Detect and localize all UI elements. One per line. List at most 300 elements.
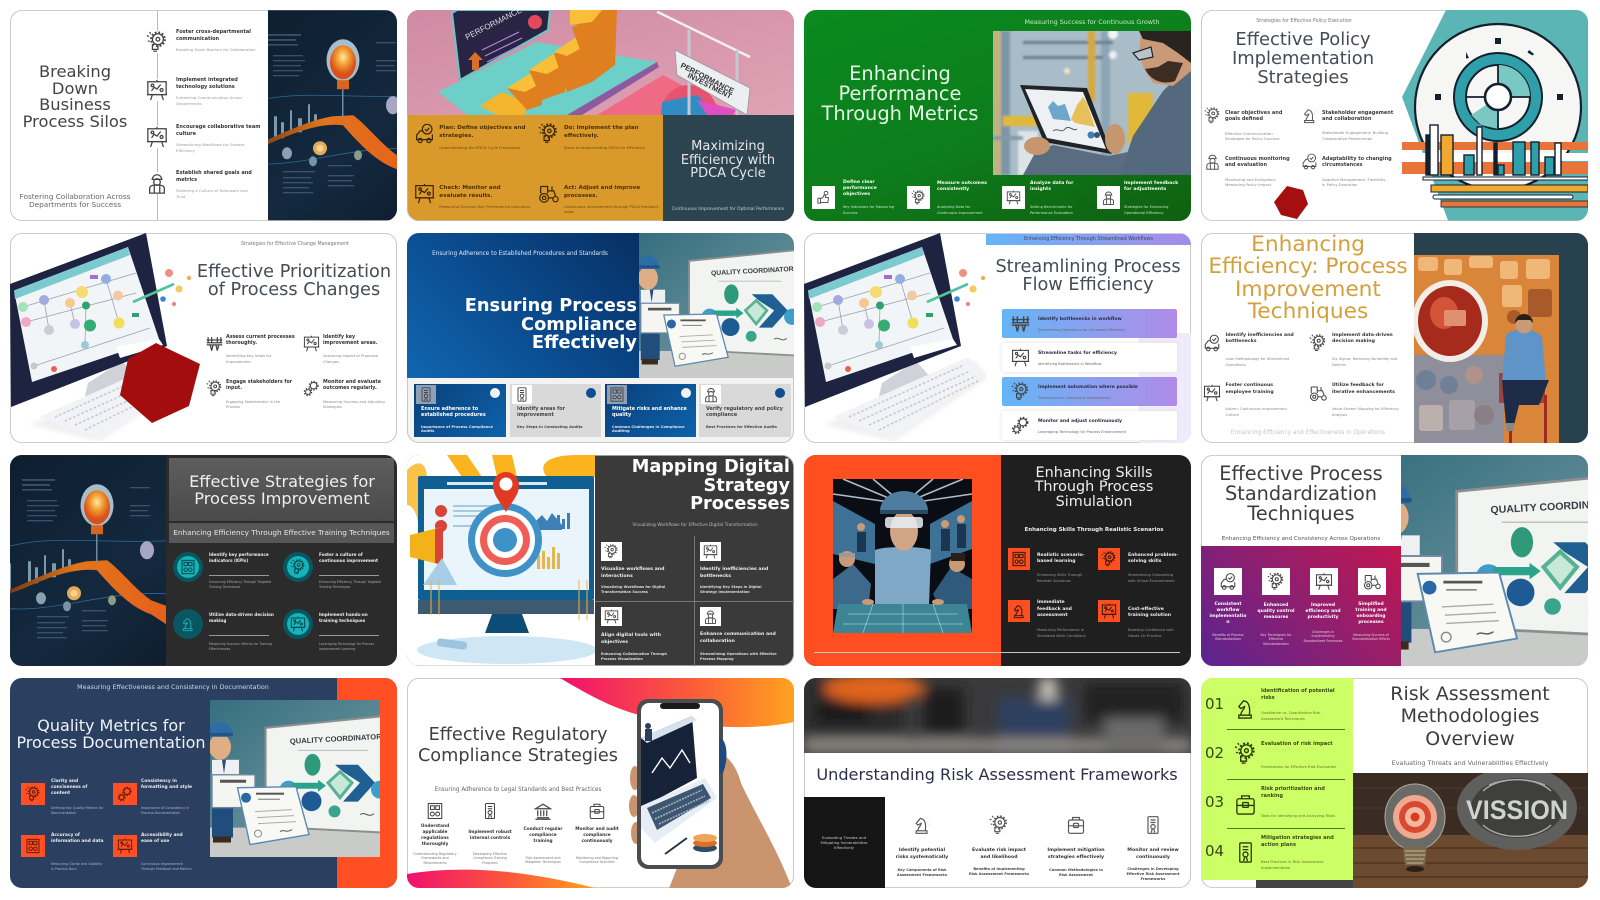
item: enhanced quality (1252, 568, 1300, 646)
item: improved efficiency: Improved (1311, 603, 1335, 608)
subtitle (820, 835, 868, 850)
item: do: Steps to Implementing PDCA for Efficiency (564, 145, 645, 150)
title: Flow Efficiency (1022, 275, 1154, 295)
panel: Effective Regulatory Compliance Strategies (407, 678, 794, 888)
item: enhanced quality: quality control (1257, 609, 1295, 614)
image: man beside food plate collage (1414, 254, 1559, 444)
card: identify areas: Identify areas for (517, 406, 565, 412)
item: consistency: Consistency in (141, 779, 177, 784)
item: adaptability: Adaptability to changing (1322, 156, 1392, 162)
title (23, 62, 127, 131)
item: adaptability: circumstances (1322, 162, 1363, 168)
item: performance objectives: Key Indicators for Measuring (843, 205, 894, 209)
item: scenario-based learning: Enhancing Skills Through (1037, 573, 1082, 577)
panel: Mapping Digital Strategy Processes (407, 455, 794, 666)
title: of Process Changes (208, 280, 380, 300)
card: ensure adherence: Audits (421, 429, 434, 433)
item: identify risks: Assessment Frameworks (897, 872, 947, 876)
item: analyze data: Performance Evaluation (1030, 211, 1073, 215)
panel: blue title block (407, 232, 639, 378)
item: improved efficiency: Implementing (1312, 634, 1334, 638)
item: monitor outcomes: Monitor and evaluate (323, 380, 381, 384)
item: monitor and audit: Monitoring and Reporting (576, 856, 618, 860)
item: do (538, 123, 645, 150)
item: immediate feedback: Immediate (1037, 600, 1065, 605)
image: bulb and city (10, 455, 166, 666)
item: clear objectives: Strategies for Policy Success (1225, 136, 1279, 141)
item: data-driven decision making: Utilize data-driven decision (209, 612, 274, 617)
item: simplified training: training and (1355, 608, 1387, 613)
banner: subtitle (169, 523, 394, 543)
item: evaluate impact: and likelihood (980, 854, 1018, 860)
title: Efficiency: Process (1208, 254, 1408, 279)
subtitle: Evaluating Threats and (822, 835, 866, 840)
item 01 (1205, 688, 1349, 726)
item: data-driven decisions: Six Sigma: Reducing Variability and (1332, 356, 1397, 360)
item: accessibility: ease of use (141, 839, 169, 844)
panel: Ensuring Process Compliance Effectively (407, 232, 794, 443)
item: analyze data: Setting Benchmarks for (1030, 205, 1072, 209)
title (1390, 682, 1550, 750)
item: clear objectives: Clear objectives and (1225, 110, 1282, 116)
item: assess current processes (206, 334, 295, 364)
item: cost-effective training: Cost-effective (1128, 606, 1164, 612)
item: plan: Understanding the PDCA Cycle Framework (439, 145, 520, 150)
item: problem solving: Enhanced problem- (1128, 552, 1178, 558)
item: identify KPIs: Identify key performance (209, 552, 269, 557)
item: immediate feedback: Simulated Work Conditions (1037, 634, 1086, 638)
item: visualize workflows: Visualize workflows and (601, 566, 664, 572)
subtitle: Effectively (834, 845, 854, 850)
item: align digital tools: Process Visualization (601, 656, 643, 660)
item: visualize workflows: Transformation Success (601, 590, 648, 594)
panel: orange block (804, 455, 1001, 666)
image: quality coordinator (639, 233, 794, 378)
item: performance objectives: Define clear (843, 180, 875, 185)
item: monitor and review: continuously (1136, 854, 1170, 860)
card: mitigate risks: Common Challenges in Compliance (612, 424, 685, 428)
item: collaborative team culture: Efficiency (176, 148, 195, 153)
item: performance objectives: performance (843, 186, 877, 191)
item: culture of improvement (283, 552, 393, 592)
item: immediate feedback: assessment (1037, 613, 1068, 618)
item: integrated technology: Departments (176, 101, 202, 106)
item: cost-effective training: Boosting Confidence with (1128, 628, 1174, 632)
item: scenario-based learning: Realistic scenario- (1037, 552, 1085, 558)
item: implement mitigation: strategies effectively (1048, 854, 1104, 860)
item: consistent workflow: implementatio (1210, 614, 1246, 619)
item: culture of improvement: Training Techniques (319, 584, 350, 588)
item: internal controls: Programs (482, 861, 498, 865)
item: engage stakeholders: Process (226, 405, 240, 409)
item: adaptability: in Policy Execution (1322, 182, 1357, 187)
item: monitor and audit: continuously (581, 839, 613, 844)
title: Streamlining Process (995, 256, 1181, 276)
item: stakeholder engagement: Stakeholder engagement (1322, 110, 1393, 116)
item: act: loops (564, 209, 574, 214)
item: identify inefficiencies: Identifying Key Steps in Digital (700, 584, 762, 588)
item: immediate feedback: feedback and (1037, 607, 1072, 612)
title: Through Process (1035, 479, 1153, 495)
item: shared goals: Trust (176, 194, 185, 199)
card: identify areas: improvement (517, 412, 554, 418)
item: internal controls: Implement robust (468, 830, 512, 835)
item: simplified training: onboarding (1356, 614, 1386, 619)
panel: Effective Strategies for Process Improvement (10, 455, 397, 666)
item 01: risks (1261, 695, 1275, 701)
image: engineer with tablet (993, 31, 1191, 175)
item: utilize feedback: iterative enhancements (1332, 390, 1395, 395)
item: monitor and audit (573, 802, 621, 868)
banner: subtitle (986, 234, 1191, 244)
card: verify compliance: Best Practices for Effective Audits (706, 424, 777, 428)
item: cost-effective training: Hands-On Practice (1128, 634, 1161, 638)
item: identify inefficiencies (700, 542, 790, 597)
item: monitor outcomes (304, 379, 385, 409)
title (681, 139, 775, 181)
item: understand regulations: regulations (421, 836, 449, 841)
title: Breaking (39, 62, 111, 81)
card: verify compliance: compliance (706, 412, 737, 418)
item: consistent workflow: Standardization (1215, 637, 1241, 641)
item: hands-on training (283, 609, 393, 652)
item: identify KPIs (173, 552, 281, 592)
subtitle: Strategies for Effective Change Management (241, 242, 349, 246)
item: align digital tools: objectives (601, 640, 628, 644)
item: monitor and review: Monitor and review (1127, 848, 1179, 852)
item: enhanced quality: Standardization (1263, 642, 1289, 646)
item: continuous monitoring (1206, 154, 1290, 187)
item: enhanced quality: measures (1264, 615, 1288, 620)
item: implement feedback (1097, 180, 1178, 215)
item: utilize feedback: Utilize feedback for (1332, 383, 1384, 388)
title (1208, 232, 1408, 324)
item 01: 01 (1205, 694, 1224, 712)
subtitle: Mitigating Vulnerabilities (820, 840, 868, 845)
title (189, 472, 375, 506)
item: assess current processes: Assess current processes (226, 334, 295, 340)
item: consistency: Process Documentation (141, 811, 180, 815)
item: continuous monitoring: Monitoring and Evaluation: (1225, 176, 1276, 182)
item: problem solving: Streamlining Onboarding (1128, 573, 1173, 577)
item: compliance training: training (533, 839, 553, 844)
item: accuracy: in Process Docs (51, 867, 77, 871)
item 04: 04 (1205, 842, 1224, 860)
panel: dark side block (1414, 232, 1588, 444)
item: monitor and review: Frameworks (1141, 876, 1165, 880)
title: Process Documentation (16, 732, 206, 752)
item 02: Frameworks for Effective Risk Evaluation (1261, 764, 1336, 768)
row: monitor and adjust: Monitor and adjust continuously (1038, 419, 1122, 424)
item: collaborative team culture: Streamlining Workflows for Greater (176, 142, 244, 147)
item: identify inefficiencies: bottlenecks (1226, 339, 1257, 344)
title (632, 458, 790, 514)
item 03: Risk prioritization and (1261, 786, 1325, 792)
item: utilize feedback: Value Stream Mapping for Efficiency (1332, 407, 1399, 411)
panel: Effective Policy Implementation Strategies (1201, 10, 1588, 220)
item: identify risks: Key Components of Risk (897, 868, 947, 872)
item: employee training: Kaizen: Continuous Improvement (1226, 407, 1287, 411)
title: Effectively (532, 332, 637, 353)
image: performance staircase: PERFORMANCE (679, 61, 736, 95)
item: simplified training (1347, 568, 1397, 646)
item: implement mitigation: Common Methodologies in (1049, 868, 1103, 872)
item: shared goals: metrics (176, 177, 197, 183)
item: cross-departmental communication: Breaking Down Barriers for Collaboration (176, 47, 256, 52)
item: act: Act: Adjust and improve (564, 185, 640, 191)
title (1232, 28, 1374, 88)
item 01: Qualitative vs. Quantitative Risk (1261, 711, 1321, 715)
item: plan (416, 124, 526, 150)
image: performance staircase (407, 10, 794, 115)
item: improved efficiency: efficiency and (1305, 609, 1341, 614)
title: Strategy (704, 476, 790, 496)
item: adaptability (1302, 154, 1392, 187)
item: measure outcomes: Measure outcomes (937, 181, 987, 186)
image: blurred machinery banner (804, 678, 1191, 752)
subtitle: Strategies for Effective Policy Execution (1256, 19, 1352, 24)
item: enhance communication: Streamlining Operations with Effective (700, 652, 777, 656)
item: compliance training: compliance (529, 833, 557, 838)
item: enhance communication: Enhance communication and (700, 632, 776, 636)
subtitle: Visualizing Workflows for Effective Digital Transformation (632, 523, 758, 528)
title: Enhancing (849, 62, 951, 85)
item: key improvement areas: Changes (323, 360, 339, 364)
banner: subtitle: Enhancing Efficiency Through Streamlined Workflows (1024, 236, 1153, 242)
item: accessibility: Accessibility and (141, 833, 183, 838)
item: performance objectives: Success (843, 211, 857, 215)
item: check: evaluate results. (439, 193, 493, 199)
title (197, 262, 391, 300)
item: implement feedback: Implement feedback (1124, 181, 1178, 186)
item: data-driven decisions (1310, 332, 1397, 366)
item: accuracy: Measuring Clarity and Usability (51, 862, 102, 866)
item: engage stakeholders: Engage stakeholders for (226, 380, 292, 384)
item: cross-departmental communication: Foster cross-departmental (176, 29, 251, 35)
title: Methodologies (1401, 705, 1539, 727)
row: identify bottlenecks: Streamlining Operations for Increased Efficiency (1038, 328, 1125, 332)
item: cross-departmental communication: communication (176, 36, 219, 42)
title: Implementation (1232, 48, 1374, 68)
title: Simulation (1056, 494, 1132, 510)
item: understand regulations: thoroughly (422, 842, 448, 847)
row: monitor and adjust: Leveraging Technology for Process Enhancement (1038, 430, 1126, 434)
item: identify inefficiencies: Lean Methodology for Streamlined (1226, 356, 1289, 360)
item: engage stakeholders: Engaging Stakeholders in the (226, 400, 280, 404)
item: enhanced quality: Effective (1269, 637, 1283, 641)
item: integrated technology: Enhancing Communication Across (176, 95, 242, 100)
subtitle (20, 192, 130, 209)
subtitle: Ensuring Adherence to Legal Standards and Best Practices (435, 786, 601, 792)
item: understand regulations: Requirements (424, 861, 446, 865)
image: quality coordinator (1401, 455, 1588, 666)
item: clear objectives (1204, 107, 1282, 141)
item: clear objectives: goals defined (1225, 116, 1263, 122)
item: enhanced quality: Key Techniques for (1261, 633, 1291, 637)
caption: Enhancing Efficiency and Effectiveness in Operations (1231, 430, 1385, 436)
item: culture of improvement: continuous improvement (319, 558, 378, 563)
panel: dark title block (663, 115, 794, 221)
item: visualize workflows: interactions (601, 574, 633, 578)
item: monitor outcomes: Strategies (323, 405, 342, 409)
panel: Risk Assessment Methodologies Overview (1201, 678, 1588, 888)
item: culture of improvement: Enhancing Efficiency Through Targeted (319, 580, 381, 584)
item: clarity: Defining Key Quality Metrics for (51, 806, 103, 810)
row: implement automation: Techniques for Continuous Improvement (1038, 396, 1111, 400)
item: clarity: conciseness of (51, 785, 87, 790)
item: key improvement areas: Assessing Impact of Proposed (323, 354, 378, 358)
item: data-driven decisions: decision making (1332, 339, 1375, 344)
panel: green list block (1201, 678, 1353, 880)
item: identify KPIs: indicators (KPIs) (209, 558, 248, 563)
item: consistent workflow: Benefits of Process (1212, 633, 1244, 637)
item: assess current processes: Improvement (226, 360, 251, 364)
image: target bulb and vision sign: VISSION (1466, 794, 1568, 824)
title (1035, 466, 1153, 509)
subtitle: Continuous Improvement for Optimal Performance (672, 207, 784, 212)
panel: Enhancing Efficiency: Process Improvement Techniques (1201, 232, 1588, 443)
title: Process Silos (23, 112, 127, 131)
title: Business (39, 95, 111, 114)
item: understand regulations: Understanding Regulatory (413, 852, 457, 856)
item: continuous monitoring: Measuring Policy Impact (1225, 182, 1271, 187)
row: identify bottlenecks (1002, 308, 1177, 338)
item: clarity (21, 779, 106, 817)
item: identify KPIs: Enhancing Efficiency Through Targeted (209, 580, 271, 584)
item: implement mitigation: Implement mitigation (1047, 848, 1105, 852)
item: clarity: content (51, 791, 70, 796)
item: evaluate impact (975, 814, 1023, 880)
item: assess current processes: Identifying Key Areas for (226, 354, 271, 358)
card: mitigate risks: Mitigate risks and enhance (612, 406, 687, 412)
title: Ensuring Process (465, 295, 637, 316)
item: stakeholder engagement: and collaboration (1322, 116, 1371, 122)
item: consistent workflow: Consistent (1214, 602, 1242, 607)
item: act (539, 185, 659, 214)
item: evaluate impact: Evaluate risk impact (972, 848, 1026, 852)
item: enhanced quality: Enhanced (1264, 603, 1288, 608)
decoration: red hexagon (1274, 186, 1308, 219)
row: monitor and adjust (1002, 411, 1177, 440)
item: align digital tools: Enhancing Collaboration Through (601, 652, 667, 656)
item: implement feedback: Strategies for Enhancing (1124, 205, 1168, 209)
panel: Effective Process Standardization Techniques (1201, 455, 1588, 666)
item: measure outcomes (907, 180, 987, 215)
item: accessibility: Continuous Improvement (141, 862, 183, 866)
title: Compliance (521, 314, 637, 334)
item: collaborative team culture (146, 124, 260, 153)
item: align digital tools (601, 607, 689, 663)
subtitle: Measuring Effectiveness and Consistency in Documentation (77, 682, 269, 690)
card: verify compliance: Verify regulatory and policy (706, 406, 783, 412)
item: performance objectives: objectives (843, 192, 870, 197)
panel: black block (804, 796, 885, 888)
item: culture of improvement: Foster a culture of (319, 552, 363, 557)
item: stakeholder engagement (1304, 109, 1394, 141)
item 03: 03 (1205, 792, 1224, 810)
item: compliance training: Conduct regular (523, 827, 563, 832)
row: streamline tasks: Identifying Bottlenecks in Workflow (1038, 362, 1101, 366)
title: Mapping Digital (632, 457, 790, 477)
title: Risk Assessment (1390, 682, 1550, 704)
row: implement automation (1002, 377, 1177, 406)
item: immediate feedback (1008, 600, 1090, 641)
item: collaborative team culture: Encourage collaborative team (176, 124, 260, 130)
item: simplified training: processes (1358, 620, 1384, 625)
title (1219, 464, 1383, 524)
item: improved efficiency (1299, 568, 1347, 646)
item: implement feedback: Operational Efficiency (1124, 211, 1164, 215)
title: Through Metrics (822, 102, 978, 125)
panel: Quality Metrics for Process Documentation (10, 678, 397, 888)
card: ensure adherence: established procedures (421, 412, 486, 418)
item: problem solving: solving skills (1128, 559, 1161, 564)
item: identify inefficiencies: Operations (1226, 362, 1246, 366)
item: compliance training (519, 802, 567, 868)
item: consistency: formatting and style (141, 785, 192, 790)
item: identify inefficiencies: Strategy Implementation (700, 590, 750, 594)
item: check: Check: Monitor and (439, 185, 501, 191)
item: identify risks: risks systematically (896, 854, 948, 860)
item: employee training (1203, 383, 1303, 419)
image: woman with visor (833, 479, 972, 633)
item: consistency (113, 779, 203, 817)
item: analyze data: insights (1030, 187, 1051, 192)
panel: Effective Prioritization of Process Changes (10, 232, 397, 443)
item: stakeholder engagement: Collaborative Partnerships (1322, 136, 1372, 141)
item: problem solving: with Virtual Environments (1128, 579, 1174, 583)
item: monitor and audit: Monitor and audit (575, 827, 619, 832)
item: accuracy: information and data (51, 839, 103, 844)
item: engage stakeholders (206, 379, 292, 409)
item: data-driven decision making: Measuring Success: Metrics for Training (209, 642, 272, 646)
title: Compliance Strategies (418, 746, 618, 766)
subtitle: Ensuring Adherence to Established Procedures and Standards (432, 250, 608, 256)
item: consistent workflow: workflow (1216, 608, 1240, 613)
item: measure outcomes: Continuous Improvement (937, 211, 983, 215)
item: scenario-based learning: Realistic Scenarios (1037, 579, 1071, 583)
image: performance staircase: INVESTMENT (686, 71, 734, 101)
card: identify areas (510, 384, 601, 437)
subtitle: Fostering Collaboration Across (20, 192, 130, 201)
item: identify inefficiencies: Identify inefficiencies and (1226, 332, 1294, 338)
title (995, 256, 1181, 295)
item: key improvement areas: Identify key (323, 334, 355, 340)
item: simplified training: Measuring Success of (1353, 633, 1389, 637)
item: align digital tools: Align digital tools with (601, 632, 661, 638)
item: visualize workflows: Visualizing Workflows for Digital (601, 584, 665, 588)
item 04: action plans (1261, 842, 1296, 848)
title: Effective Strategies for (189, 472, 375, 490)
panel: Enhancing Skills Through Process Simulation (804, 455, 1191, 666)
decoration: red hexagon (120, 343, 200, 423)
item: identify risks: Identify potential (899, 848, 945, 852)
title: Efficiency with (681, 153, 775, 168)
item: internal controls: Developing Effective (473, 852, 507, 856)
item: plan: strategies. (439, 133, 473, 139)
item: act: processes. (564, 193, 598, 199)
title (16, 716, 206, 750)
item: shared goals: Establish shared goals and (176, 170, 252, 176)
item: monitor and audit: compliance (583, 833, 611, 838)
subtitle: Enhancing Skills Through Realistic Scenarios (1024, 527, 1164, 533)
item: accuracy (21, 833, 106, 872)
item: evaluate impact: Benefits of Implementing (973, 867, 1025, 871)
item 01: Identification of potential (1261, 688, 1335, 694)
title: Techniques (1248, 299, 1368, 324)
item: enhance communication: Process Mapping (700, 656, 734, 660)
subtitle: Measuring Success for Continuous Growth (1024, 18, 1160, 26)
